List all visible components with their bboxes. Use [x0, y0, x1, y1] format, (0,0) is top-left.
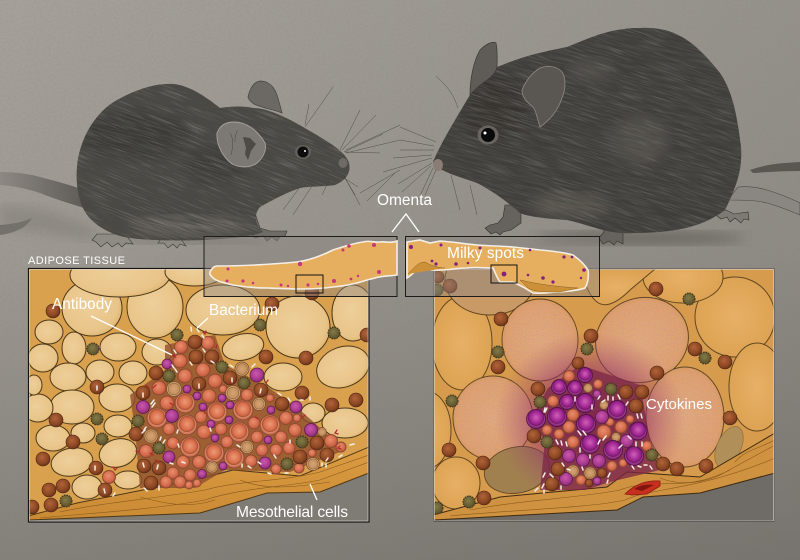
nose: right mouse	[433, 159, 443, 171]
immune cell cluster: right	[431, 271, 737, 514]
purple cells: left	[136, 359, 318, 478]
immune cell cluster: left	[25, 286, 374, 514]
tail: right mouse	[728, 187, 800, 215]
body: left mouse	[77, 84, 349, 240]
adipocytes: right	[434, 269, 774, 510]
small purple cells: right	[560, 390, 634, 486]
inset frame: right	[406, 236, 600, 296]
antibodies: left	[113, 331, 341, 470]
shadow: right mouse	[535, 231, 745, 245]
label: Cytokines: Cytokines	[646, 396, 712, 413]
inner layer: right	[408, 262, 578, 292]
tail tip: left mouse	[0, 218, 32, 235]
inset frame: left	[204, 236, 397, 296]
inflammation tint: right	[501, 339, 678, 492]
milky spot dots: left	[226, 243, 381, 287]
legs and feet: left mouse	[92, 210, 287, 248]
tan cells: right	[567, 384, 620, 479]
mesothelial layer: left	[28, 447, 369, 520]
label: Adipose tissue: ADIPOSE TISSUE	[28, 255, 125, 267]
tan cells: left	[144, 362, 326, 473]
whiskers: left mouse	[283, 87, 400, 215]
arrow: Antibody	[91, 316, 172, 355]
panel background: left	[28, 268, 369, 522]
legs and feet: right mouse	[485, 205, 749, 245]
omentum inset: right	[406, 236, 600, 296]
arrow: Mesothelial cells	[310, 484, 317, 500]
label: Antibody: Antibody	[52, 296, 112, 313]
panel: adipose tissue, right	[28, 192, 786, 522]
brown cells: right	[432, 271, 737, 505]
fur texture: left mouse	[76, 84, 350, 240]
front ear: left mouse	[217, 122, 266, 167]
shadow: left mouse	[0, 205, 270, 244]
detail marker: left	[296, 275, 323, 293]
brown-olive cells: right	[484, 426, 744, 494]
label: Mesothelial cells: Mesothelial cells	[236, 504, 348, 521]
omentum shape: left	[210, 241, 397, 289]
omentum inset: left	[204, 236, 397, 296]
omentum shape: right	[407, 240, 588, 293]
eye: left mouse	[295, 145, 311, 159]
nose: left mouse	[338, 158, 348, 168]
arrow: Bacterium	[197, 318, 208, 328]
mouse: right	[383, 28, 800, 246]
label: Bacterium: Bacterium	[209, 302, 278, 319]
mesothelial layer: right	[433, 433, 775, 520]
label: Milky spots: Milky spots	[447, 245, 524, 262]
tail: left mouse	[0, 172, 84, 208]
fur texture: right mouse	[433, 28, 742, 233]
panel: adipose tissue, left	[23, 253, 375, 522]
olive cells: left	[60, 319, 340, 507]
mouse: left	[0, 80, 400, 248]
label: Omenta: Omenta	[377, 192, 432, 209]
medium salmon cells: left	[102, 336, 346, 489]
milky spot dots: right	[409, 244, 586, 284]
salmon cells: right	[542, 370, 652, 485]
eye: right mouse	[478, 126, 498, 144]
tissue base: left	[28, 268, 369, 516]
front ear: right mouse	[522, 66, 565, 127]
large salmon cells: left	[147, 393, 280, 468]
bacteria: left	[95, 327, 354, 496]
olive cells: right	[431, 284, 711, 514]
brown cells: left	[25, 286, 374, 514]
back ear: right mouse	[470, 42, 497, 95]
panel border: right	[434, 268, 774, 522]
deep purple cells: right	[526, 368, 647, 466]
stipple on inflamed adipocytes: right	[453, 298, 724, 466]
tissue base: right	[433, 268, 775, 515]
body: right mouse	[433, 28, 741, 233]
panel border: left	[28, 268, 369, 522]
detail marker: right	[491, 265, 517, 283]
tail fragment: right mouse	[750, 162, 800, 173]
adipocytes: left	[23, 253, 375, 499]
arrow: Omenta bracket	[392, 214, 419, 232]
whiskers: right mouse	[383, 76, 477, 215]
blood vessel: right	[625, 481, 660, 495]
back ear: left mouse	[248, 81, 282, 113]
panel background: right	[433, 268, 775, 522]
bacteria: right	[535, 395, 652, 493]
